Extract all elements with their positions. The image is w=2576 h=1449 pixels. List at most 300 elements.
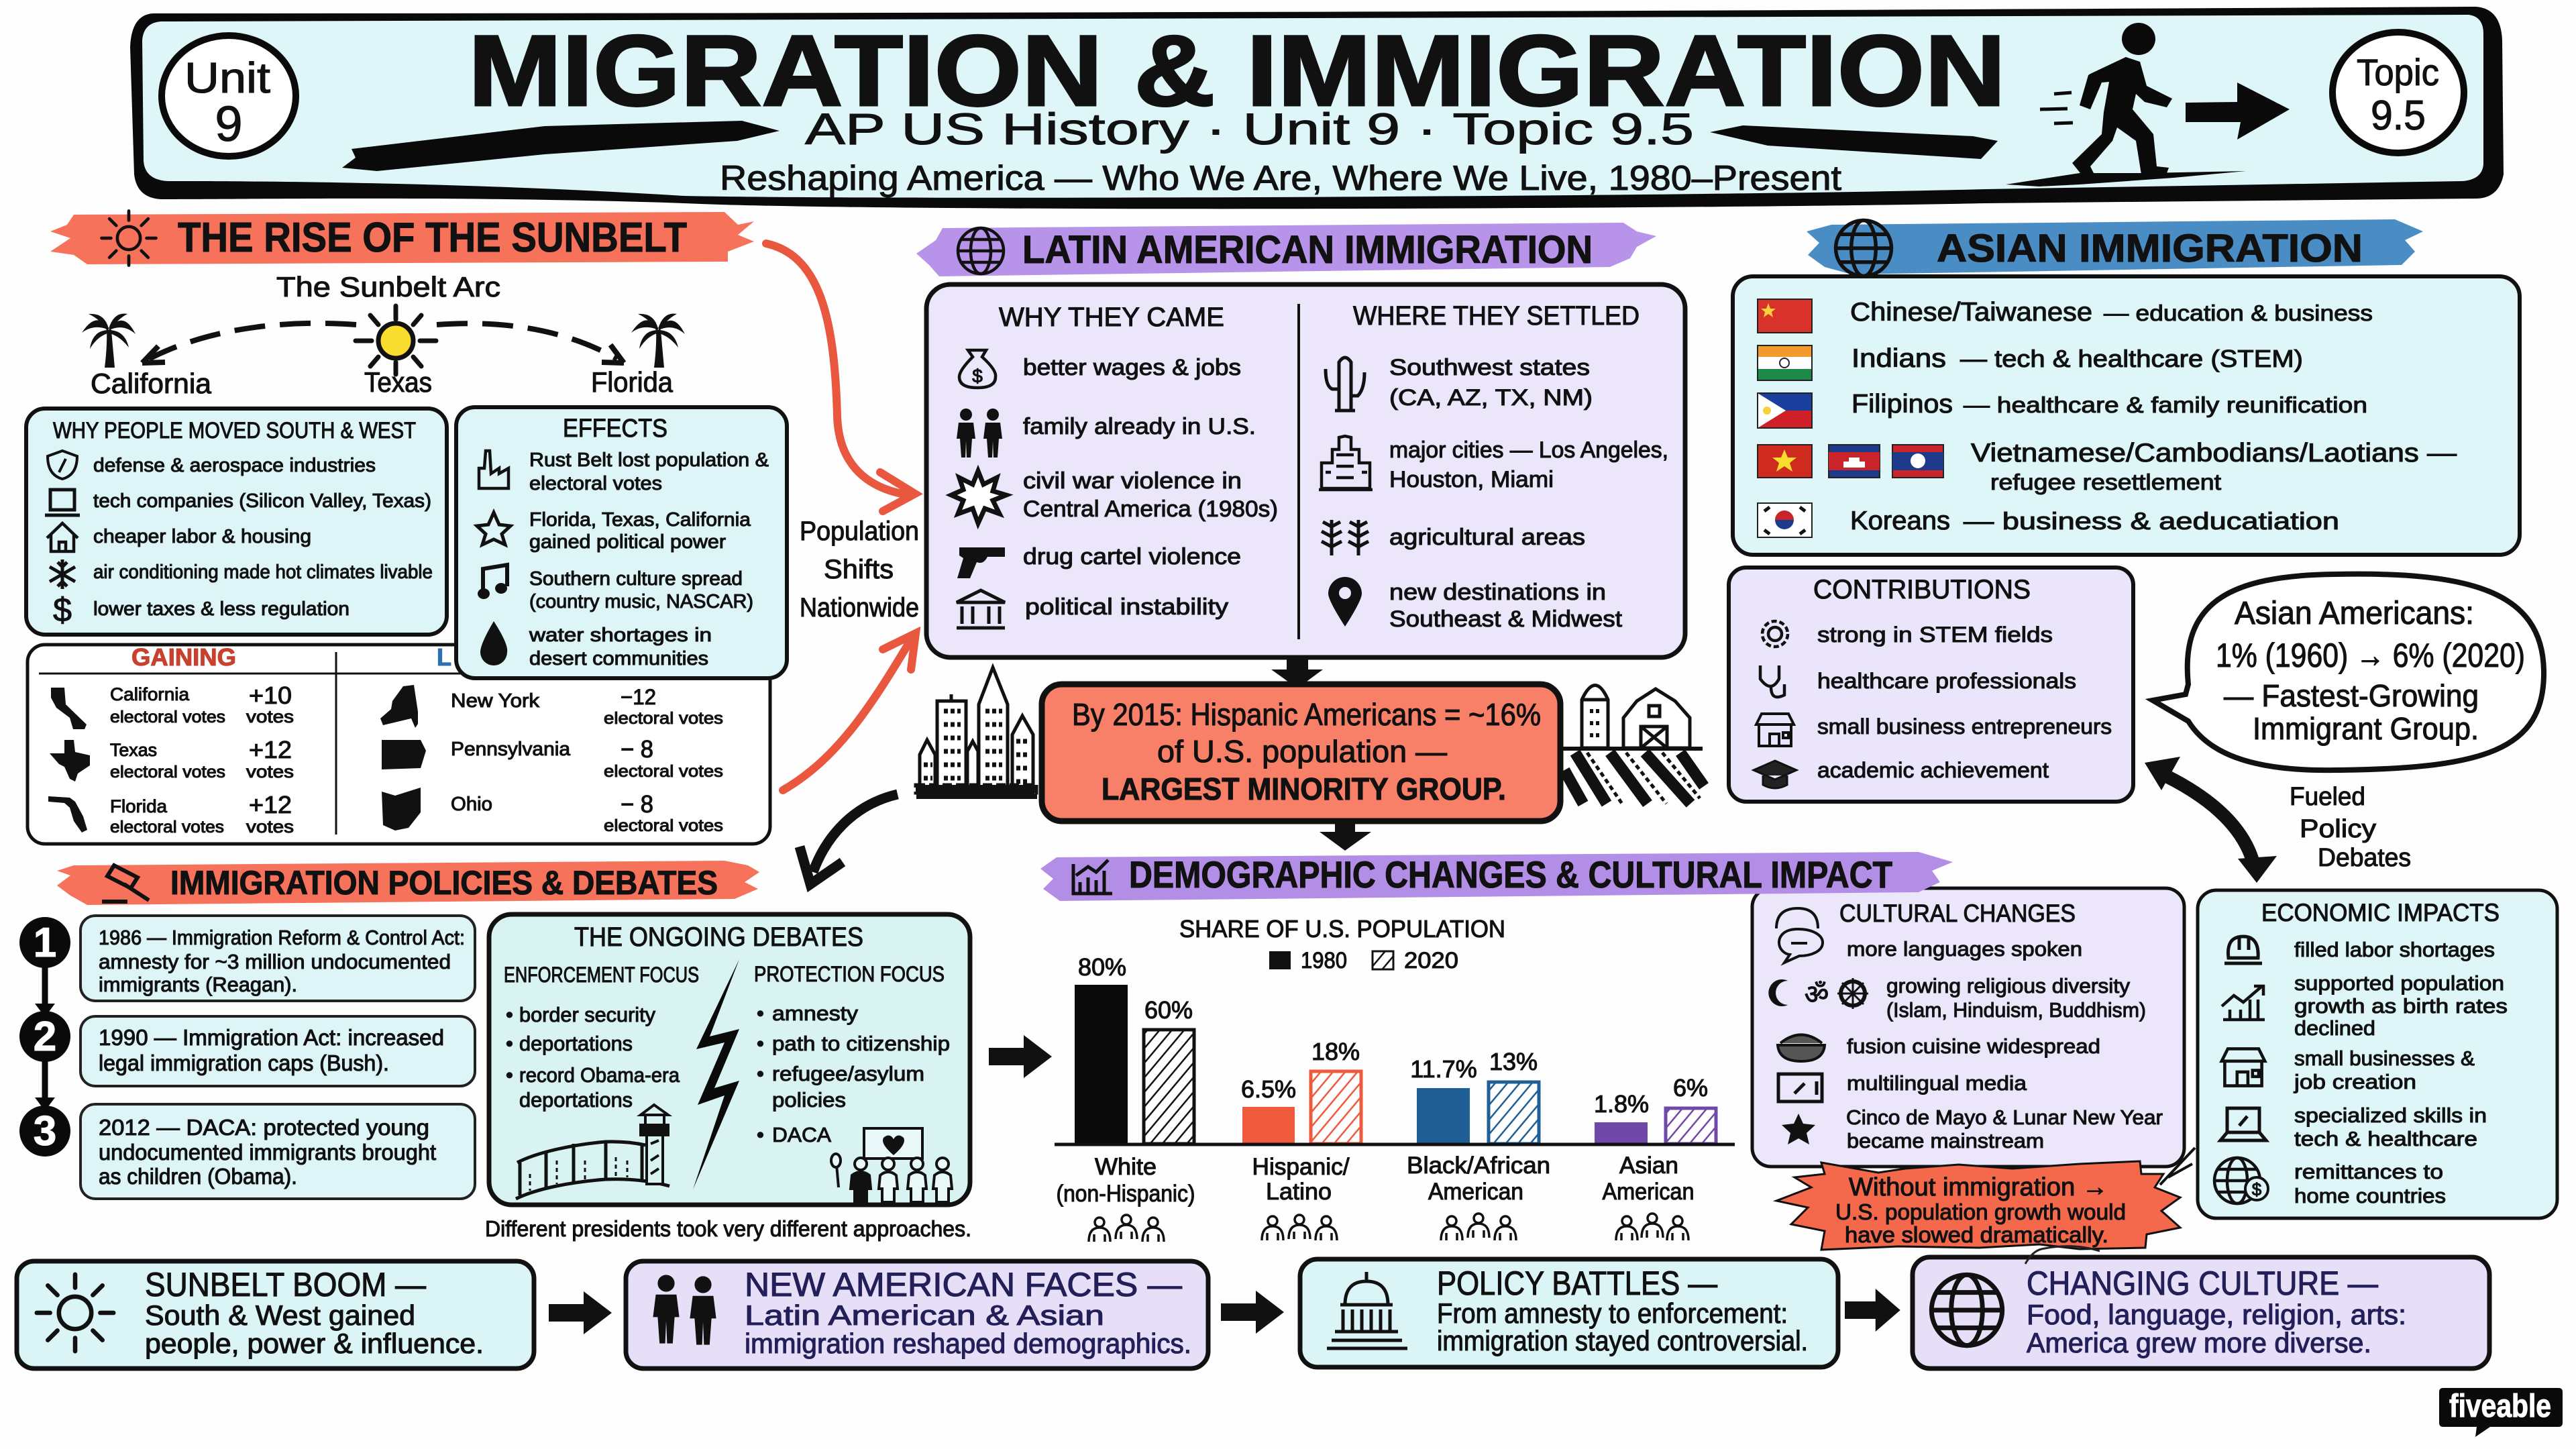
protection column xyxy=(754,962,950,1146)
state labels: Texas xyxy=(364,366,432,398)
step 2 xyxy=(19,1011,70,1062)
protection column: PROTECTION FOCUS xyxy=(754,962,945,986)
where they settled heading: WHERE THEY SETTLED xyxy=(1353,301,1640,331)
value labels: 1.8% xyxy=(1594,1090,1649,1118)
brush stroke left xyxy=(342,121,780,171)
economic heading: ECONOMIC IMPACTS xyxy=(2261,899,2500,926)
rust belt text xyxy=(529,449,769,494)
arrow: contributions to economic impacts xyxy=(2145,757,2277,883)
why they came heading: WHY THEY CAME xyxy=(999,303,1224,332)
category labels: Hispanic/ xyxy=(1252,1154,1350,1180)
icon: handgun xyxy=(957,547,1005,578)
enforcement column: deportations xyxy=(519,1088,633,1112)
cultural heading: CULTURAL CHANGES xyxy=(1839,900,2076,927)
multilingual text: multilingual media xyxy=(1847,1071,2027,1095)
pennsylvania row: − 8 xyxy=(621,735,653,763)
civil war text xyxy=(1023,468,1278,522)
icon: palm california xyxy=(82,313,136,368)
political power text: Florida, Texas, California xyxy=(529,509,751,531)
arrow: down to demographics xyxy=(1320,821,1371,851)
icon: storefront xyxy=(1756,714,1794,746)
panel: economic impacts xyxy=(2198,890,2557,1218)
heading: immigration policies and debates: IMMIGRATION POLICIES & DEBATES xyxy=(170,864,718,902)
box: 1990 xyxy=(80,1016,475,1086)
flag: philippines xyxy=(1758,393,1812,428)
religious diversity text: growing religious diversity xyxy=(1886,974,2130,998)
topic badge: 9.5 xyxy=(2371,93,2426,139)
flag: china xyxy=(1758,299,1812,333)
florida row: electoral votes xyxy=(110,818,224,837)
category labels: American xyxy=(1428,1179,1523,1205)
box: 2012: as children (Obama). xyxy=(99,1164,297,1189)
debates heading: THE ONGOING DEBATES xyxy=(574,922,863,952)
category labels: White xyxy=(1095,1154,1157,1180)
sunbelt arc diagram xyxy=(82,271,685,399)
specialized skills text: tech & healthcare xyxy=(2294,1127,2477,1150)
summary: sunbelt boom: people, power & influence. xyxy=(145,1328,484,1359)
legend: 2020 xyxy=(1404,948,1458,973)
chinese text: — education & business xyxy=(2104,301,2373,325)
box: 1986: amnesty for ~3 million undocumented xyxy=(99,950,451,973)
icon: house xyxy=(47,523,78,551)
agricultural text: agricultural areas xyxy=(1389,525,1585,550)
pennsylvania row xyxy=(451,735,723,781)
icon: star xyxy=(477,513,511,545)
vietnamese text: refugee resettlement xyxy=(1990,470,2221,494)
enforcement column: deportations xyxy=(519,1032,633,1055)
protection column: refugee/asylum xyxy=(772,1062,924,1085)
protection column: DACA xyxy=(772,1123,831,1146)
indians text: — tech & healthcare (STEM) xyxy=(1960,345,2303,372)
small businesses text xyxy=(2294,1046,2475,1093)
florida row xyxy=(110,791,294,837)
step 1: 1 xyxy=(34,920,56,966)
protection column: amnesty xyxy=(772,1002,859,1025)
logo: fiveable: fiveable xyxy=(2449,1389,2551,1424)
value labels: 6% xyxy=(1673,1074,1708,1102)
filipinos text xyxy=(1851,390,2367,419)
specialized skills text: specialized skills in xyxy=(2294,1104,2487,1127)
topic badge xyxy=(2332,32,2464,153)
icon: family xyxy=(957,409,1002,458)
filipinos text: Filipinos xyxy=(1851,390,1953,419)
flag: vietnam xyxy=(1758,445,1812,478)
panel: contributions xyxy=(1729,568,2133,802)
panel heading: WHY PEOPLE MOVED SOUTH & WEST xyxy=(53,418,416,443)
icon: hard hat xyxy=(2224,936,2262,963)
category labels: (non-Hispanic) xyxy=(1056,1181,1195,1207)
legend xyxy=(1269,948,1458,973)
tagline: Reshaping America — Who We Are, Where We Live, 1980–Present xyxy=(720,159,1842,198)
callout: asian americans speech bubble: 1% (1960) → 6% (2020) xyxy=(2216,637,2525,674)
small businesses text: small businesses & xyxy=(2294,1046,2475,1070)
arrow: summary 2 to 3 xyxy=(1221,1291,1284,1334)
summary: policy battles: From amnesty to enforcement: xyxy=(1437,1297,1788,1329)
icon: globe with dollar: $ xyxy=(2252,1179,2262,1199)
arrow: to policies xyxy=(800,794,898,884)
bars: black xyxy=(1417,1082,1539,1144)
population shifts label: Shifts xyxy=(824,555,894,584)
protection column: • xyxy=(757,1032,764,1055)
cinco de mayo text: Cinco de Mayo & Lunar New Year xyxy=(1846,1106,2163,1129)
bar chart: share of us population xyxy=(1055,915,1735,1242)
florida row: +12 xyxy=(249,791,292,818)
cheaper labor text: cheaper labor & housing xyxy=(93,526,311,547)
box: 1990: 1990 — Immigration Act: increased xyxy=(99,1025,444,1050)
callout: asian americans speech bubble: Immigrant Group. xyxy=(2253,711,2479,746)
enforcement column: • xyxy=(506,1063,513,1087)
icon: religious symbols xyxy=(1768,978,1868,1010)
population shifts label: Population xyxy=(800,517,919,546)
icon: snowflake xyxy=(50,559,75,589)
gaining heading: GAINING xyxy=(131,643,236,671)
chinese text: Chinese/Taiwanese xyxy=(1850,298,2092,327)
arrow: summary 1 to 2 xyxy=(549,1291,612,1334)
panel: electoral votes gaining and losing xyxy=(28,643,770,844)
texas row: Texas xyxy=(110,740,157,760)
value labels: 11.7% xyxy=(1410,1055,1477,1083)
icon: california xyxy=(51,688,87,729)
enforcement column: border security xyxy=(519,1003,655,1026)
protection column: policies xyxy=(772,1088,846,1112)
fusion text: fusion cuisine widespread xyxy=(1847,1034,2100,1058)
state labels: Florida xyxy=(591,366,674,398)
heading: rise of the sunbelt xyxy=(50,211,754,266)
population growth text: declined xyxy=(2294,1016,2375,1040)
southwest text: Southwest states xyxy=(1389,355,1590,380)
major cities text: major cities — Los Angeles, xyxy=(1389,437,1668,463)
texas row: electoral votes xyxy=(110,763,225,782)
summary: new american faces: NEW AMERICAN FACES — xyxy=(745,1266,1182,1303)
category labels: Asian xyxy=(1619,1152,1678,1179)
flag: india xyxy=(1758,345,1812,380)
arc arrow left xyxy=(142,323,356,363)
new york row xyxy=(451,685,723,728)
florida row: Florida xyxy=(110,796,168,816)
religious diversity text xyxy=(1886,974,2146,1022)
unit badge: 9 xyxy=(215,96,243,152)
callout: hispanic americans stat: By 2015: Hispanic Americans = ~16% xyxy=(1072,697,1541,732)
step 3 xyxy=(19,1106,70,1157)
summary: sunbelt boom: SUNBELT BOOM — xyxy=(145,1266,426,1303)
logo: fiveable xyxy=(2439,1388,2563,1437)
starburst tail over summary box xyxy=(2025,1246,2100,1264)
protection column: path to citizenship xyxy=(772,1032,950,1055)
icon: sun xyxy=(37,1275,113,1351)
indians text: Indians xyxy=(1851,344,1946,373)
icon: stethoscope xyxy=(1760,665,1784,697)
icon: walking figure xyxy=(2006,23,2246,186)
heading: rise of the sunbelt: THE RISE OF THE SUNBELT xyxy=(178,215,687,261)
value labels: 6.5% xyxy=(1241,1075,1296,1103)
california row: votes xyxy=(246,706,294,727)
summary: sunbelt boom xyxy=(17,1261,534,1368)
state labels xyxy=(91,366,674,399)
rust belt text: electoral votes xyxy=(529,473,662,494)
summary: new american faces: Latin American & Asian xyxy=(745,1299,1104,1331)
remittances text xyxy=(2294,1160,2446,1208)
box: 2012: 2012 — DACA: protected young xyxy=(99,1115,429,1140)
icon: wheat xyxy=(1322,520,1368,555)
flag: cambodia xyxy=(1829,445,1880,478)
panel: latin american immigration xyxy=(926,284,1685,657)
summary: policy battles: immigration stayed controversial. xyxy=(1437,1325,1808,1356)
brush stroke right xyxy=(1710,125,1998,159)
category labels: Latino xyxy=(1266,1179,1332,1205)
small businesses text: job creation xyxy=(2294,1070,2416,1093)
chart title: SHARE OF U.S. POPULATION xyxy=(1179,915,1505,943)
state labels: California xyxy=(91,368,212,399)
ohio row: Ohio xyxy=(451,794,492,815)
icon: gavel xyxy=(102,865,149,902)
drug cartel text: drug cartel violence xyxy=(1023,544,1241,570)
better wages text: better wages & jobs xyxy=(1023,355,1241,380)
heading: asian immigration: ASIAN IMMIGRATION xyxy=(1937,227,2363,270)
protection column: • xyxy=(757,1062,764,1085)
icon: bowl xyxy=(1778,1034,1825,1061)
vietnamese text xyxy=(1971,439,2457,494)
icon: speech bubbles xyxy=(1776,908,1823,963)
fueled policy debates label xyxy=(2290,783,2411,872)
academic text: academic achievement xyxy=(1817,758,2049,782)
vietnamese text: Vietnamese/Cambodians/Laotians — xyxy=(1971,439,2457,468)
title: MIGRATION & IMMIGRATION xyxy=(468,14,2006,127)
topic badge: Topic xyxy=(2357,51,2439,93)
icon: two people xyxy=(653,1275,716,1345)
heading: asian immigration xyxy=(1807,219,2423,276)
illustration: family with heart sign xyxy=(831,1128,952,1202)
texas row: +12 xyxy=(249,736,292,763)
icon: texas xyxy=(50,740,90,782)
political power text xyxy=(529,509,751,553)
ohio row xyxy=(451,790,723,835)
contributions heading: CONTRIBUTIONS xyxy=(1813,575,2031,604)
callout: without immigration starburst: have slowed dramatically. xyxy=(1845,1222,2108,1247)
icon: palm florida xyxy=(631,313,685,368)
unit badge xyxy=(162,36,296,156)
arrow: votes to latin america xyxy=(783,633,916,790)
category labels: Black/African xyxy=(1407,1152,1550,1179)
remittances text: home countries xyxy=(2294,1184,2446,1208)
bars: hispanic xyxy=(1242,1071,1361,1144)
enforcement column xyxy=(504,963,699,1112)
category labels xyxy=(1056,1152,1695,1207)
cinco de mayo text: became mainstream xyxy=(1847,1129,2044,1152)
icon: shield xyxy=(48,451,77,479)
arrow: summary 3 to 4 xyxy=(1845,1289,1900,1332)
new destinations text xyxy=(1389,580,1623,632)
icon: star xyxy=(1782,1114,1815,1144)
small business text: small business entrepreneurs xyxy=(1817,714,2112,739)
icon: money bag xyxy=(959,350,996,388)
pennsylvania row: electoral votes xyxy=(604,762,723,781)
losing heading, partly hidden: L xyxy=(437,643,451,671)
value labels: 60% xyxy=(1144,996,1193,1024)
population growth text xyxy=(2294,971,2508,1040)
icon: florida xyxy=(48,796,87,833)
fueled policy debates label: Fueled xyxy=(2290,783,2365,811)
texas row: votes xyxy=(246,761,294,782)
population shifts label: Nationwide xyxy=(800,593,919,623)
box: 2012 xyxy=(80,1104,475,1199)
icon: religious symbols: ॐ xyxy=(1805,979,1829,1010)
icon: dollar: $ xyxy=(53,591,72,629)
pennsylvania row: Pennsylvania xyxy=(451,739,571,760)
icon: globe with dollar xyxy=(2214,1158,2268,1203)
healthcare text: healthcare professionals xyxy=(1817,669,2076,693)
illustration: border fence and tower xyxy=(516,1105,669,1199)
heading: latin american immigration xyxy=(916,223,1656,276)
step 3: 3 xyxy=(34,1108,56,1155)
summary: policy battles: POLICY BATTLES — xyxy=(1437,1265,1717,1302)
bars: white xyxy=(1075,985,1194,1144)
california row xyxy=(110,682,294,727)
new destinations text: Southeast & Midwest xyxy=(1389,606,1623,632)
political power text: gained political power xyxy=(529,531,726,553)
callout: without immigration starburst: U.S. population growth would xyxy=(1835,1199,2126,1224)
family text: family already in U.S. xyxy=(1023,414,1256,439)
icon: government building xyxy=(957,590,1005,628)
major cities text: Houston, Miami xyxy=(1389,467,1554,492)
value labels: 80% xyxy=(1078,953,1126,981)
summary: changing culture: Food, language, religion, arts: xyxy=(2027,1299,2406,1330)
water shortages text: water shortages in xyxy=(529,625,712,646)
subtitle: AP US History · Unit 9 · Topic 9.5 xyxy=(805,104,1694,154)
callout: without immigration starburst: Without immigration → xyxy=(1849,1173,2108,1201)
fueled policy debates label: Debates xyxy=(2318,844,2411,872)
koreans text xyxy=(1850,506,2339,535)
callout: without immigration starburst xyxy=(1776,1148,2195,1250)
icon: graduation cap xyxy=(1754,761,1796,788)
indians text xyxy=(1851,344,2303,373)
step 2: 2 xyxy=(34,1014,56,1060)
civil war text: Central America (1980s) xyxy=(1023,496,1278,522)
summary: new american faces: immigration reshaped demographics. xyxy=(745,1328,1191,1359)
icon: capitol xyxy=(1327,1272,1407,1348)
panel: effects xyxy=(456,407,787,678)
box: 1990: legal immigration caps (Bush). xyxy=(99,1051,389,1075)
icon: cactus xyxy=(1326,358,1364,411)
icon: globe xyxy=(1836,221,1891,276)
labor text: filled labor shortages xyxy=(2294,938,2495,961)
icon: ohio xyxy=(382,788,421,830)
timeline xyxy=(19,916,475,1199)
ohio row: − 8 xyxy=(621,790,653,818)
koreans text: Koreans xyxy=(1850,506,1950,535)
protection column: • xyxy=(757,1002,764,1025)
panel: asian immigrant groups xyxy=(1733,276,2520,555)
panel: cultural changes xyxy=(1752,888,2184,1167)
chinese text xyxy=(1850,298,2373,327)
icon: pennsylvania xyxy=(382,740,426,769)
icon: globe xyxy=(958,228,1004,274)
panel: ongoing debates xyxy=(489,914,970,1205)
box: 1986: immigrants (Reagan). xyxy=(99,973,297,996)
effects heading: EFFECTS xyxy=(563,415,667,443)
icon: burst xyxy=(951,471,1006,523)
heading: latin american immigration: LATIN AMERICAN IMMIGRATION xyxy=(1022,228,1593,272)
box: 2012: undocumented immigrants brought xyxy=(99,1140,436,1165)
callout: hispanic americans stat: LARGEST MINORITY GROUP. xyxy=(1102,771,1506,806)
specialized skills text xyxy=(2294,1104,2487,1150)
southern culture text: (country music, NASCAR) xyxy=(529,591,753,612)
unit badge: Unit xyxy=(184,54,270,102)
defense text: defense & aerospace industries xyxy=(93,455,376,476)
population shifts label xyxy=(800,517,919,623)
value labels: 18% xyxy=(1311,1038,1360,1065)
flag: south korea xyxy=(1758,503,1812,537)
icon: laptop xyxy=(45,490,80,515)
arrow: down to hispanic stat xyxy=(1271,656,1323,688)
arc heading: The Sunbelt Arc xyxy=(276,271,500,303)
southern culture text: Southern culture spread xyxy=(529,568,743,590)
florida row: votes xyxy=(246,816,294,837)
california row: California xyxy=(110,684,190,704)
icon: sun texas xyxy=(356,306,436,374)
summary: changing culture xyxy=(1913,1257,2489,1368)
arrow: walking direction xyxy=(2186,83,2290,140)
filipinos text: — healthcare & family reunification xyxy=(1964,392,2367,417)
callout: asian americans speech bubble: Asian Americans: xyxy=(2235,596,2474,631)
value labels: 13% xyxy=(1489,1048,1538,1075)
box: 1986: 1986 — Immigration Reform & Control Act: xyxy=(99,926,465,949)
icon: bar chart xyxy=(1073,860,1112,894)
people icons xyxy=(1089,1214,1688,1242)
summary: changing culture: CHANGING CULTURE — xyxy=(2027,1265,2378,1302)
icon: map pin xyxy=(1328,577,1362,627)
summary: sunbelt boom: South & West gained xyxy=(145,1299,415,1331)
icon: storefront xyxy=(2222,1049,2265,1086)
california row: +10 xyxy=(249,682,292,709)
caption: presidents: Different presidents took very different approaches. xyxy=(485,1216,971,1241)
panel: why people moved xyxy=(26,409,447,635)
value labels xyxy=(1078,953,1708,1118)
southwest text: (CA, AZ, TX, NM) xyxy=(1389,385,1593,411)
lower taxes text: lower taxes & less regulation xyxy=(93,598,350,620)
category labels: American xyxy=(1602,1179,1695,1205)
arrow: sunbelt to latin america xyxy=(766,244,915,511)
population growth text: growth as birth rates xyxy=(2294,994,2508,1018)
header banner xyxy=(130,7,2504,209)
icon: music note xyxy=(478,565,507,599)
icon: lightning bolt xyxy=(693,959,739,1189)
stem text: strong in STEM fields xyxy=(1817,623,2053,647)
religious diversity text: (Islam, Hinduism, Buddhism) xyxy=(1886,998,2146,1022)
california row: electoral votes xyxy=(110,708,225,727)
texas row xyxy=(110,736,294,782)
icon: new york xyxy=(380,685,418,728)
tech text: tech companies (Silicon Valley, Texas) xyxy=(93,490,431,512)
protection column: • xyxy=(757,1123,764,1146)
icon: media screen xyxy=(1778,1074,1822,1102)
callout: hispanic americans stat: of U.S. population — xyxy=(1157,734,1447,769)
callout: hispanic americans stat xyxy=(1042,684,1560,821)
icon: water drop xyxy=(480,621,507,665)
icon: growth chart xyxy=(2222,986,2265,1020)
illustration: farm xyxy=(1562,686,1704,805)
water shortages text xyxy=(529,625,712,669)
icon: laptop xyxy=(2220,1108,2266,1140)
fueled policy debates label: Policy xyxy=(2300,815,2376,843)
remittances text: remittances to xyxy=(2294,1160,2443,1183)
southern culture text xyxy=(529,568,753,612)
new destinations text: new destinations in xyxy=(1389,580,1606,605)
icon: money bag: $ xyxy=(972,366,983,386)
summary: new american faces xyxy=(626,1261,1208,1368)
water shortages text: desert communities xyxy=(529,648,708,669)
summary: changing culture: America grew more diverse. xyxy=(2027,1327,2371,1358)
heading: demographic changes and cultural impact: DEMOGRAPHIC CHANGES & CULTURAL IMPACT xyxy=(1129,853,1892,896)
